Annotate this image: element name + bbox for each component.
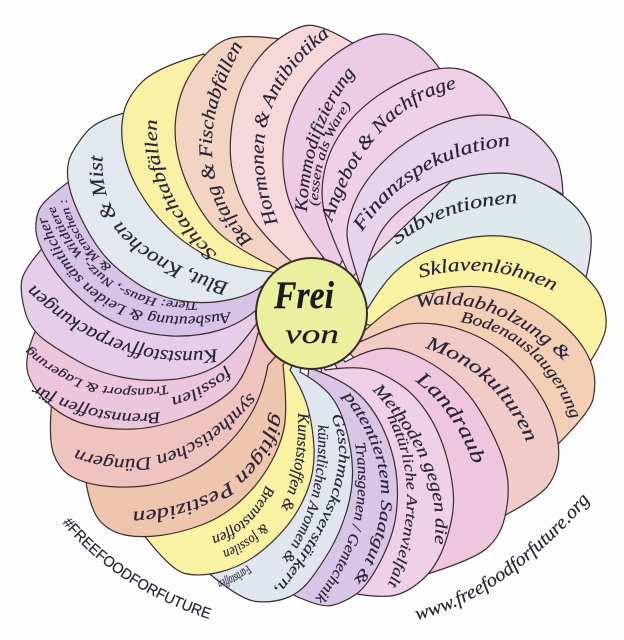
petal: Finanzspekulation bbox=[346, 114, 564, 290]
petal: Landraub: Landraub bbox=[414, 372, 484, 462]
petal: Schlachtabfällen: Schlachtabfällen bbox=[144, 120, 216, 260]
petal: Subventionen bbox=[361, 174, 592, 308]
petal: Kunststoffen und fossilen Brennstoffen: Brennstoffen bbox=[212, 485, 274, 543]
centre circle: Frei von: von bbox=[285, 319, 339, 349]
petal: fossilen Brennstoffen für Transport und Lagerung: fossilen bbox=[172, 365, 231, 404]
petal: Kommodifizierung (Essen als Ware): (essen als Ware) bbox=[308, 102, 350, 206]
petal: Sklavenlöhnen bbox=[366, 235, 607, 362]
petal: Finanzspekulation: Finanzspekulation bbox=[353, 137, 510, 232]
petal: fossilen Brennstoffen für Transport und Lagerung bbox=[26, 325, 259, 430]
hashtag: #FREEFOODFORFUTURE bbox=[62, 518, 212, 619]
petal: giftigen Pestiziden: giftigen Pestiziden bbox=[133, 412, 280, 522]
petal: Monokulturen: Monokulturen bbox=[424, 336, 534, 442]
centre circle: Frei von: Frei bbox=[273, 274, 334, 317]
petal: Ausbeutung und Leiden sämtlicher Tiere und Menschen: & Menschen : bbox=[61, 200, 111, 270]
petal: Angebot und Nachfrage: Angebot & Nachfrage bbox=[322, 80, 456, 223]
petal: Waldabholzung und Bodenauslaugerung bbox=[360, 286, 596, 444]
petal: Blut, Knochen und Mist: Blut, Knochen & Mist bbox=[89, 155, 229, 295]
petal: Geschmacksverstärkern, künstlichen Aromen und Farbstoffen: Farbstoffen bbox=[218, 565, 252, 588]
petal: Geschmacksverstärkern, künstlichen Aromen und Farbstoffen: Geschmacksverstärkern, bbox=[274, 415, 350, 590]
petal: Methoden gegen die natürliche Artenvielfalt: natürliche Artenvielfalt bbox=[387, 414, 417, 588]
petal: synthetischen Düngern bbox=[50, 334, 276, 488]
petal: Angebot und Nachfrage bbox=[321, 67, 512, 276]
petal: synthetischen Düngern: synthetischen Düngern bbox=[74, 393, 254, 471]
petal: fossilen Brennstoffen für Transport und Lagerung: Transport & Lagerung bbox=[26, 347, 168, 396]
petal: patentiertem Saatgut und Transgenen: patentiertem Saatgut & bbox=[340, 392, 392, 584]
petal: Ausbeutung und Leiden sämtlicher Tiere und Menschen: Ausbeutung & Leiden sämtlicher bbox=[39, 218, 231, 326]
petal: Ausbeutung und Leiden sämtlicher Tiere und Menschen: Tiere: Haus-, Nutz-, Wildtiere bbox=[50, 206, 197, 310]
petal: Sklavenlöhnen: Sklavenlöhnen bbox=[420, 258, 556, 291]
petal: Ausbeutung und Leiden sämtlicher Tiere und Menschen bbox=[35, 182, 262, 337]
petal: Schlachtabfällen bbox=[121, 53, 276, 273]
petal: Kunststoffverpackungen: Kunststoffverpackungen bbox=[28, 284, 218, 364]
petal: Geschmacksverstärkern, künstlichen Aromen und Farbstoffen bbox=[210, 366, 354, 602]
petal: Methoden gegen die natürliche Artenvielfalt: Methoden gegen die bbox=[372, 384, 448, 544]
petal: Kunststoffverpackungen bbox=[20, 249, 256, 381]
petal: Methoden gegen die natürliche Artenvielfalt bbox=[320, 367, 454, 597]
petal: giftigen Pestiziden bbox=[86, 357, 286, 538]
centre circle: Frei von bbox=[256, 258, 367, 369]
petal: Beifang und Fischabfällen: Beifang & Fischabfällen bbox=[199, 42, 253, 247]
petal: Kunststoffen und fossilen Brennstoffen: & fossilen bbox=[222, 524, 268, 557]
petal: patentiertem Saatgut und Transgenen: Transgenen / Gentechnik bbox=[315, 442, 366, 604]
petal: Beifang und Fischabfällen bbox=[174, 36, 290, 269]
petal: Kommodifizierung (Essen als Ware) bbox=[282, 33, 440, 265]
petal: fossilen Brennstoffen für Transport und Lagerung: Brennstoffen für bbox=[32, 387, 160, 424]
petal: Blut, Knochen und Mist bbox=[66, 112, 272, 304]
petal: Kunststoffen und fossilen Brennstoffen: Kunststoffen & bbox=[281, 412, 309, 512]
petal: Hormonen und Antibiotika: Hormonen & Antibiotika bbox=[254, 29, 329, 226]
petal: Landraub bbox=[334, 348, 509, 574]
petal: patentiertem Saatgut und Transgenen bbox=[293, 370, 398, 606]
petal: Kunststoffen und fossilen Brennstoffen bbox=[144, 363, 315, 576]
petal: Subventionen: Subventionen bbox=[394, 194, 517, 244]
petal: Kommodifizierung (Essen als Ware): Kommodifizierung bbox=[295, 68, 356, 212]
website url: www.freefoodforfuture.org bbox=[415, 494, 590, 620]
petal: Waldabholzung und Bodenauslaugerung: Waldabholzung & bbox=[416, 292, 570, 360]
petal: Monokulturen bbox=[350, 322, 560, 516]
petal: Geschmacksverstärkern, künstlichen Aromen und Farbstoffen: künstlichen Aromen & bbox=[282, 425, 329, 563]
petal: Hormonen und Antibiotika bbox=[230, 24, 353, 262]
petal: Waldabholzung und Bodenauslaugerung: Bodenauslaugerung bbox=[460, 312, 578, 418]
